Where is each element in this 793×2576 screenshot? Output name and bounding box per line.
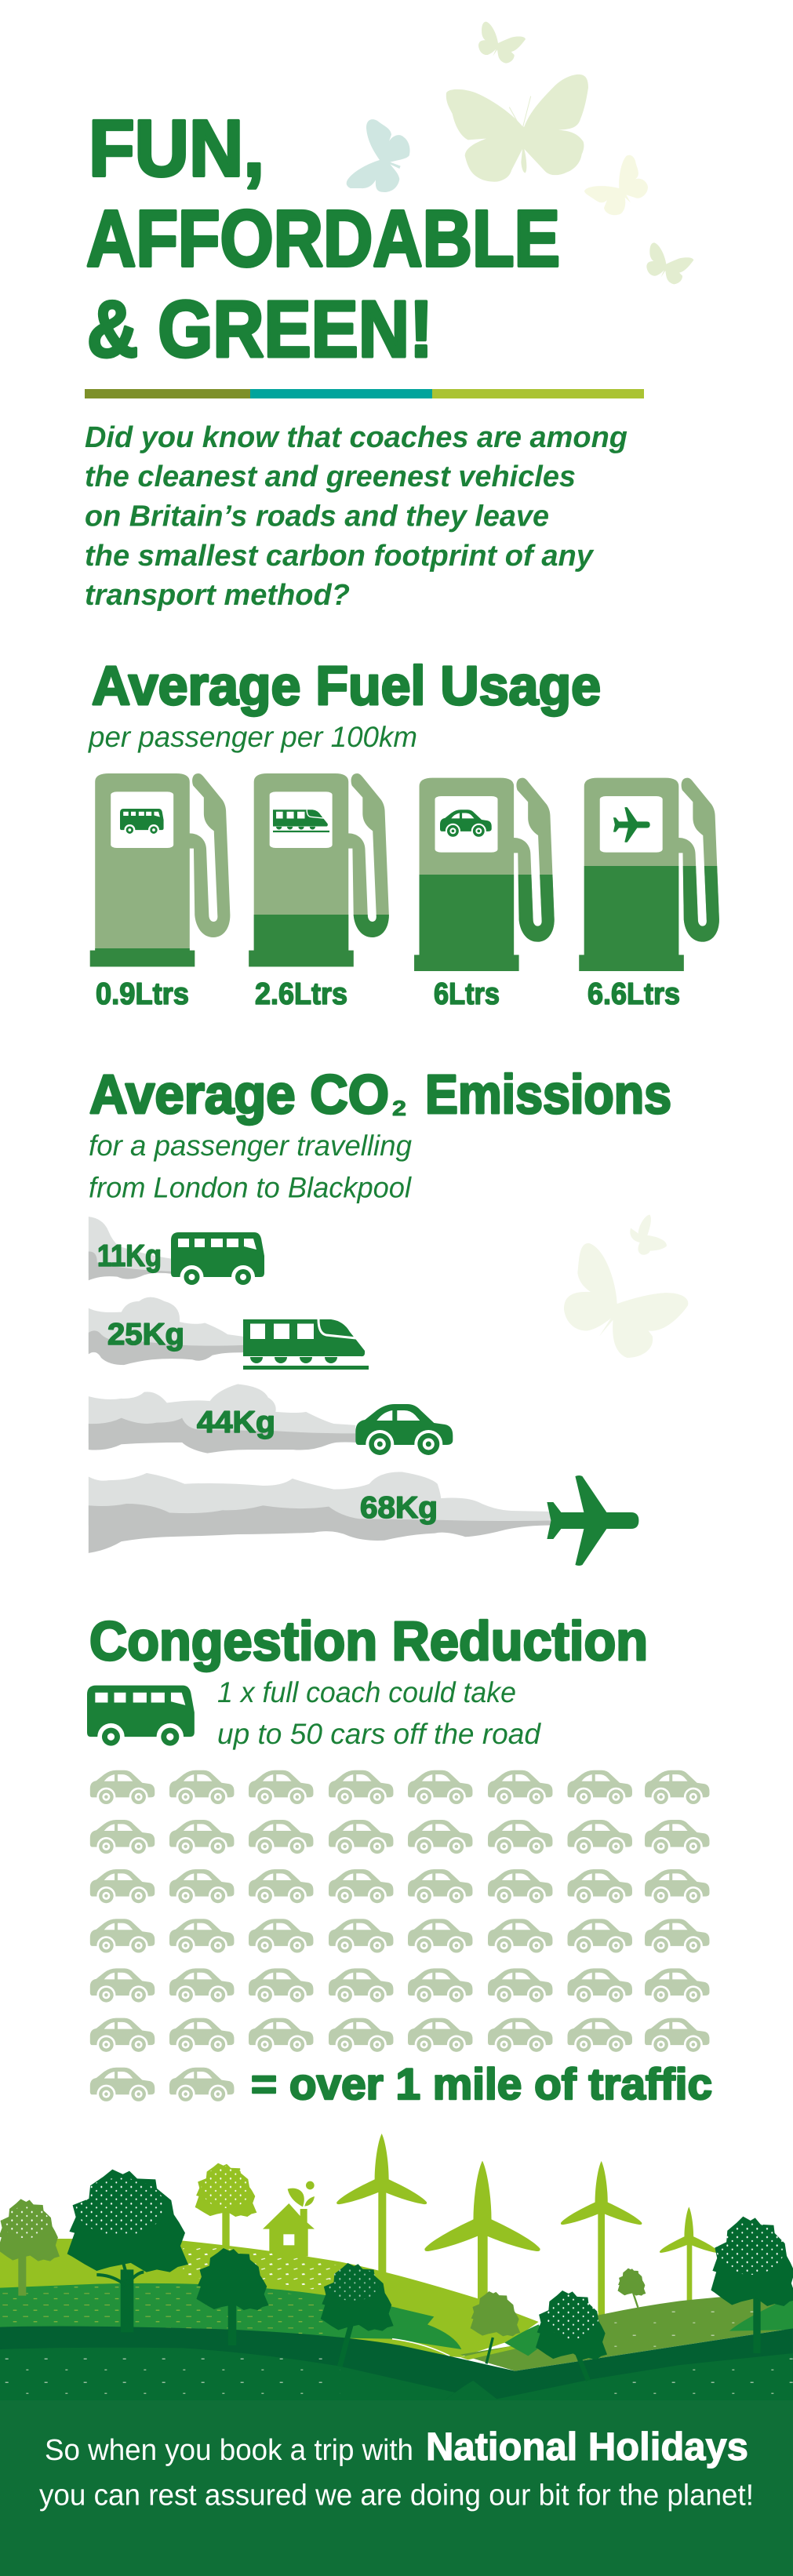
congestion text: 1 x full coach could take [217, 1676, 516, 1708]
label: 2.6 litres: 2.6Ltrs [255, 977, 347, 1011]
footer text [39, 2425, 754, 2512]
label: 44kg: 44Kg [197, 1406, 275, 1439]
butterflies: middle [564, 1215, 688, 1358]
tree: olive mid [471, 2291, 520, 2363]
intro paragraph: the cleanest and greenest vehicles [85, 460, 576, 493]
title: FUN, [89, 104, 264, 193]
subheading: emissions: for a passenger travelling [89, 1130, 412, 1162]
tree: small olive [617, 2269, 646, 2308]
icon: coach [171, 1232, 264, 1289]
congestion text: up to 50 cars off the road [217, 1718, 541, 1750]
footer text: So when you book a trip with [45, 2434, 413, 2467]
label: 25kg: 25Kg [107, 1318, 184, 1352]
heading: average CO2 emissions: Emissions [425, 1064, 671, 1125]
hills [0, 2239, 793, 2576]
tree: dark right [536, 2290, 607, 2381]
pump: plane 6.6 litres [579, 778, 719, 1011]
icon: train [273, 810, 329, 832]
emissions row: car 44kg [89, 1384, 453, 1458]
tree: light green [195, 2163, 256, 2246]
emissions row: plane 68kg [89, 1472, 638, 1566]
congestion text [217, 1676, 541, 1750]
tree: olive left [0, 2199, 60, 2296]
icon: car [440, 810, 492, 839]
butterfly: small right [646, 242, 693, 284]
tree: dark far right [711, 2217, 793, 2353]
title: AFFORDABLE [86, 194, 560, 283]
house with leaves [263, 2181, 315, 2257]
butterfly: teal [347, 119, 410, 192]
landscape illustration [0, 2134, 793, 2576]
label: 6 litres: 6Ltrs [434, 977, 500, 1011]
heading: average CO2 emissions: 2 [392, 1097, 406, 1120]
butterflies: top [347, 22, 693, 284]
tree: dark mid [321, 2263, 394, 2367]
footer text: National Holidays [426, 2425, 748, 2469]
icon: plane [547, 1475, 638, 1566]
heading: congestion reduction: Congestion Reduction [89, 1610, 648, 1672]
icon: coach [87, 1686, 195, 1750]
label: 0.9 litres: 0.9Ltrs [96, 977, 189, 1011]
label: 68kg: 68Kg [360, 1491, 438, 1525]
subheading: emissions: from London to Blackpool [89, 1172, 413, 1203]
heading: average fuel usage: Average Fuel Usage [92, 655, 601, 716]
intro paragraph: Did you know that coaches are among [85, 421, 627, 454]
icon: car [355, 1404, 453, 1458]
intro paragraph [85, 421, 627, 612]
icon: train [243, 1319, 369, 1370]
subheading: fuel: per passenger per 100km [88, 721, 417, 753]
butterfly: large pale green [446, 75, 588, 182]
callout: over 1 mile of traffic: = over 1 mile of traffic [251, 2059, 712, 2108]
intro paragraph: the smallest carbon footprint of any [85, 540, 595, 573]
subheading: emissions [89, 1130, 413, 1203]
label: 11kg: 11Kg [97, 1239, 162, 1273]
tree: large dark [67, 2170, 188, 2332]
butterfly: pale yellow [584, 155, 648, 215]
pump: coach 0.9 litres [90, 773, 230, 1011]
intro paragraph: on Britain’s roads and they leave [85, 500, 549, 533]
tri-colour divider bar [85, 389, 644, 398]
pump: car 6 litres [414, 778, 555, 1011]
pump: train 2.6 litres [249, 773, 389, 1011]
heading: average CO2 emissions: Average CO [89, 1064, 389, 1125]
title: & GREEN! [87, 284, 433, 373]
icon: coach [120, 809, 164, 835]
emissions row: coach 11kg [89, 1217, 264, 1289]
butterfly: small top [478, 22, 526, 64]
label: 6.6 litres: 6.6Ltrs [587, 977, 680, 1011]
emissions row: train 25kg [89, 1297, 369, 1370]
wind turbines [336, 2134, 718, 2319]
tree: dark centre [196, 2248, 269, 2345]
title [86, 104, 560, 373]
intro paragraph: transport method? [85, 579, 350, 612]
icon: plane [613, 807, 650, 842]
car grid: 50 cars [90, 1770, 709, 2104]
footer text: you can rest assured we are doing our bit for the planet! [39, 2479, 754, 2512]
